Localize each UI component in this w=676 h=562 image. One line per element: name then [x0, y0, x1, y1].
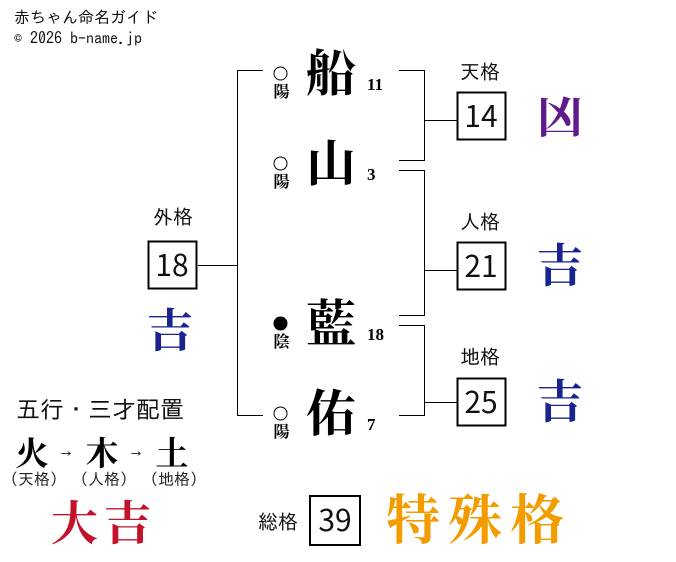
name character: 藍: 藍 [306, 296, 356, 352]
name character: 佑: 佑 [306, 386, 356, 442]
name character: 山: 山 [306, 136, 356, 192]
five elements sequence: → [60, 449, 72, 460]
person score: 人格 [460, 212, 500, 232]
five elements sequence: （地格） [142, 471, 206, 487]
total score: 総格 [258, 511, 298, 532]
person score [458, 212, 506, 290]
name character: 山 [273, 136, 376, 192]
name character: 船: 11 [367, 75, 383, 94]
bracket: heaven connector [399, 70, 457, 160]
five elements sequence: → [130, 449, 142, 460]
polarity: yang: 陽 [273, 173, 290, 191]
polarity: yin: 陰 [273, 332, 290, 351]
bracket: person connector [399, 170, 457, 316]
bracket: outer connector [198, 70, 263, 416]
name character: 船 [273, 46, 383, 102]
name character: 船: 船 [306, 46, 356, 102]
heaven score: 天格 [460, 62, 500, 82]
heaven score: 14 [464, 92, 498, 136]
verdict: good: 吉 [537, 366, 583, 432]
five elements sequence: 火 [16, 437, 48, 473]
bracket: earth connector [399, 326, 457, 416]
total score: 39 [318, 496, 352, 540]
five elements sequence: （人格） [72, 471, 136, 487]
five elements sequence: 土 [156, 436, 188, 473]
special category: 特殊格 [386, 478, 572, 555]
outer score: 18 [155, 241, 189, 285]
five elements sequence: 木 [86, 436, 118, 473]
outer score [148, 207, 196, 288]
verdict: good: 吉 [537, 230, 583, 296]
heaven score [458, 62, 506, 140]
earth score: 地格 [460, 347, 500, 367]
name character: 藍: 18 [367, 325, 384, 344]
polarity: yang: 陽 [273, 83, 290, 101]
polarity: yang: 陽 [273, 423, 290, 441]
earth score: 25 [464, 378, 498, 422]
five elements sequence: （天格） [2, 471, 66, 487]
name character: 山: 3 [367, 165, 376, 184]
verdict: good: 吉 [147, 295, 193, 361]
name character: 藍 [273, 296, 384, 352]
copyright: © 2026 b-name.jp [14, 30, 142, 46]
five elements heading: 五行・三才配置 [16, 397, 184, 421]
overall verdict: 大吉 [51, 487, 157, 554]
person score: 21 [464, 242, 498, 286]
name character: 佑: 7 [367, 415, 376, 434]
earth score [458, 347, 506, 426]
total score [258, 496, 360, 545]
five elements sequence [2, 436, 206, 487]
outer score: 外格 [153, 207, 193, 227]
verdict: bad: 凶 [537, 81, 583, 146]
title: 赤ちゃん命名ガイド [14, 9, 158, 25]
name character: 佑 [273, 386, 376, 442]
